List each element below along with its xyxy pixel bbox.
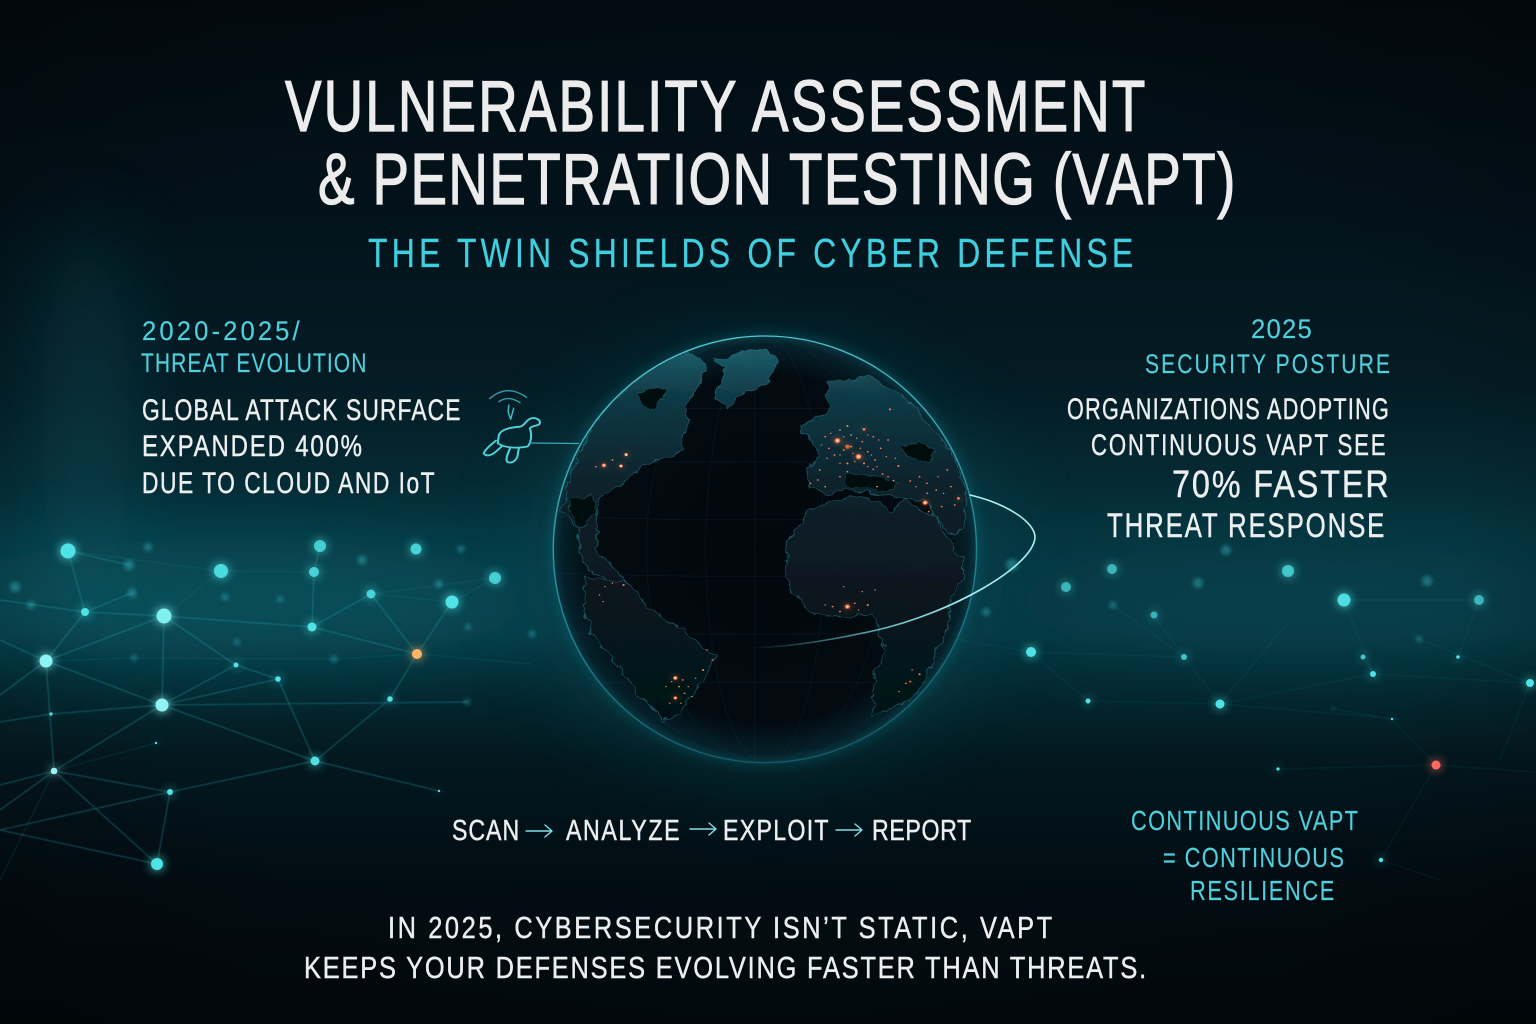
right label: 2025 <box>1251 313 1312 344</box>
globe grid lines <box>553 336 977 763</box>
title <box>285 66 1235 220</box>
globe rim <box>553 336 977 763</box>
flow labels: SCAN <box>452 813 519 847</box>
closing statement <box>304 911 1146 986</box>
right statistic: ORGANIZATIONS ADOPTING <box>1067 391 1389 426</box>
alert nodes <box>412 649 1440 770</box>
continuous resilience note: CONTINUOUS VAPT <box>1131 805 1358 837</box>
turtle icon <box>484 391 540 463</box>
flow labels: EXPLOIT <box>723 813 829 847</box>
connector line <box>529 442 579 444</box>
continents <box>561 349 968 722</box>
right statistic: CONTINUOUS VAPT SEE <box>1091 428 1386 462</box>
continuous resilience note: RESILIENCE <box>1190 875 1334 907</box>
right statistic: 70% FASTER <box>1172 464 1389 506</box>
subtitle: THE TWIN SHIELDS OF CYBER DEFENSE <box>368 230 1133 276</box>
process flow <box>452 813 971 847</box>
flow arrows <box>526 823 862 837</box>
right statistic <box>1067 391 1389 545</box>
closing statement: KEEPS YOUR DEFENSES EVOLVING FASTER THAN THREATS. <box>304 951 1146 986</box>
left panel: threat evolution <box>141 315 460 500</box>
left statistic: GLOBAL ATTACK SURFACE <box>142 393 460 427</box>
network: bright nodes <box>40 540 1534 870</box>
network: connecting lines <box>0 546 1536 880</box>
network: dim background nodes <box>10 543 1432 710</box>
left label: THREAT EVOLUTION <box>141 349 366 379</box>
left label: 2020-2025/ <box>142 315 300 346</box>
left statistic <box>142 393 460 500</box>
flow labels: ANALYZE <box>566 813 680 847</box>
flow labels: REPORT <box>872 813 971 847</box>
title: & PENETRATION TESTING (VAPT) <box>318 139 1235 220</box>
continuous resilience note: = CONTINUOUS <box>1163 842 1344 874</box>
left statistic: EXPANDED 400% <box>142 428 362 463</box>
city glows <box>602 428 960 700</box>
orbit ring <box>751 495 1035 648</box>
left label <box>141 315 366 379</box>
title: VULNERABILITY ASSESSMENT <box>285 66 1145 147</box>
globe <box>551 334 979 764</box>
turtle body <box>484 418 540 463</box>
seas <box>566 387 932 524</box>
right panel: security posture <box>1067 313 1390 545</box>
flow labels <box>452 813 971 847</box>
continuous resilience note <box>1131 805 1358 907</box>
city lights <box>603 439 927 699</box>
right statistic: THREAT RESPONSE <box>1107 508 1384 545</box>
right label: SECURITY POSTURE <box>1145 350 1390 380</box>
signal arcs <box>490 391 527 419</box>
right label <box>1145 313 1390 380</box>
left statistic: DUE TO CLOUD AND IoT <box>142 466 435 500</box>
closing statement: IN 2025, CYBERSECURITY ISN’T STATIC, VAPT <box>388 911 1052 946</box>
